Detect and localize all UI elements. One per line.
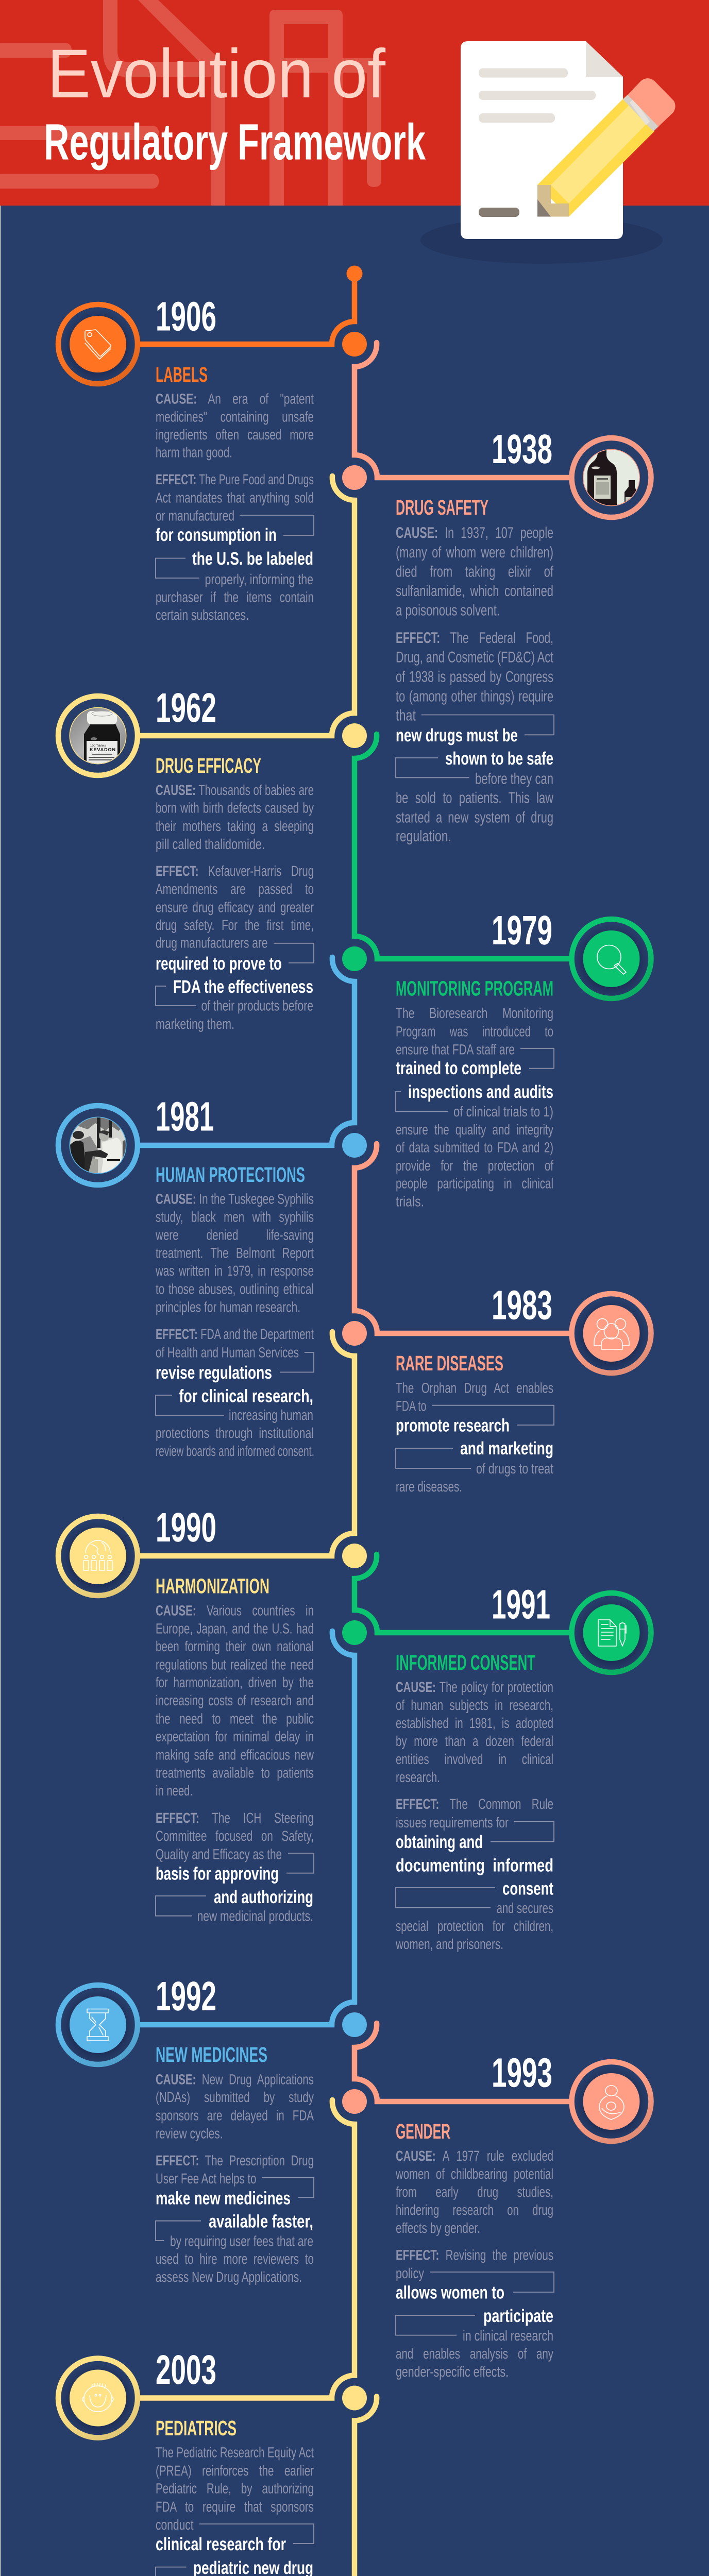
effect text: and secures bbox=[497, 1900, 553, 1916]
cause text: CAUSE: In 1937, 107 people bbox=[396, 524, 553, 541]
effect text: drug safety. For the first time, bbox=[156, 917, 314, 933]
timeline: final yellow segment bbox=[354, 2397, 377, 2576]
highlight callout: allows women to bbox=[396, 2283, 504, 2303]
effect text: drug manufacturers are bbox=[156, 935, 268, 951]
cause text: their mothers taking a sleeping bbox=[156, 818, 314, 834]
heading: NEW MEDICINES bbox=[156, 2043, 267, 2066]
highlight callout: shown to be safe bbox=[445, 749, 553, 769]
body text: FDA to bbox=[396, 1398, 427, 1414]
highlight callout: inspections and audits bbox=[408, 1082, 553, 1102]
effect text: Act mandates that anything sold bbox=[156, 489, 314, 506]
icon: magnifying glass bbox=[572, 919, 651, 998]
panel: 1983 rare diseases bbox=[396, 1282, 651, 1495]
year: 1991 bbox=[492, 1582, 550, 1627]
effect text: EFFECT: The Prescription Drug bbox=[156, 2153, 314, 2168]
effect text: User Fee Act helps to bbox=[156, 2171, 257, 2187]
cause text bbox=[396, 524, 553, 619]
effect text bbox=[396, 2247, 554, 2380]
effect text: used to hire more reviewers to bbox=[156, 2251, 314, 2267]
effect text: or manufactured bbox=[156, 508, 234, 524]
cause text: born with birth defects caused by bbox=[156, 800, 314, 816]
cause text bbox=[396, 1679, 553, 1785]
panel: 1906 labels bbox=[58, 294, 314, 623]
body text: of drugs to treat bbox=[476, 1461, 553, 1477]
body text: The Orphan Drug Act enables bbox=[396, 1380, 553, 1396]
icon: mother and child bbox=[572, 2062, 651, 2141]
timeline: salmon segment to 1983 bbox=[354, 1144, 569, 1333]
effect text: issues requirements for bbox=[396, 1815, 509, 1831]
timeline: green segment to 1991 bbox=[354, 1554, 569, 1633]
effect text: Amendments are passed to bbox=[156, 881, 314, 897]
highlight callout bbox=[156, 1363, 313, 1406]
heading: INFORMED CONSENT bbox=[396, 1651, 535, 1674]
body text: The Bioresearch Monitoring bbox=[396, 1005, 553, 1021]
cause text: CAUSE: A 1977 rule excluded bbox=[396, 2148, 553, 2164]
highlight callout bbox=[396, 1058, 553, 1102]
year: 1906 bbox=[156, 294, 216, 339]
cause text: CAUSE: The policy for protection bbox=[396, 1679, 553, 1695]
highlight callout: and authorizing bbox=[214, 1887, 313, 1907]
timeline: start cap bbox=[346, 266, 363, 281]
cause text: the need to meet the public bbox=[156, 1710, 314, 1727]
photo: Kevadon bottle: 100 Tablets bbox=[90, 744, 106, 748]
effect text: ensure drug efficacy and greater bbox=[156, 900, 314, 915]
body text: Program was introduced to bbox=[396, 1024, 553, 1040]
effect text: purchaser if the items contain bbox=[156, 589, 314, 605]
cause text bbox=[156, 391, 314, 461]
header background document pattern bbox=[0, 0, 381, 206]
panel: 2003 pediatrics bbox=[58, 2347, 314, 2576]
icon: group of people bbox=[572, 1294, 651, 1373]
panel: 1938 drug safety bbox=[396, 426, 651, 845]
year: 1979 bbox=[492, 907, 552, 953]
cause text: entities involved in clinical bbox=[396, 1751, 553, 1767]
panel: 1991 informed consent bbox=[395, 1582, 651, 1952]
body text: trials. bbox=[396, 1193, 424, 1210]
effect text: EFFECT: FDA and the Department bbox=[156, 1326, 314, 1342]
effect text: assess New Drug Applications. bbox=[156, 2269, 302, 2285]
body text: ensure the quality and integrity bbox=[396, 1122, 553, 1138]
icon: document and pen bbox=[572, 1593, 651, 1672]
cause text: a poisonous solvent. bbox=[396, 602, 500, 619]
effect text: in clinical research bbox=[463, 2328, 553, 2344]
cause text: increasing costs of research and bbox=[156, 1692, 314, 1708]
heading: PEDIATRICS bbox=[156, 2416, 237, 2440]
panel: 1981 human protections bbox=[58, 1094, 314, 1459]
body text bbox=[396, 1380, 554, 1495]
cause text: research. bbox=[396, 1769, 440, 1785]
cause text: regulations but realized the need bbox=[156, 1657, 314, 1673]
cause text bbox=[155, 1191, 314, 1315]
cause text: Europe, Japan, and the U.S. had bbox=[156, 1621, 314, 1636]
highlight callout: participate bbox=[483, 2306, 553, 2326]
effect text: EFFECT: Revising the previous bbox=[396, 2247, 553, 2263]
cause text bbox=[156, 782, 314, 852]
cause text: treatment. The Belmont Report bbox=[156, 1245, 314, 1261]
effect text: that bbox=[396, 707, 416, 724]
title bbox=[44, 36, 426, 170]
highlight callout: consent bbox=[502, 1879, 553, 1899]
effect text: special protection for children, bbox=[396, 1918, 553, 1934]
heading: MONITORING PROGRAM bbox=[396, 977, 553, 1001]
highlight callout: make new medicines bbox=[156, 2189, 291, 2209]
effect text: increasing human bbox=[229, 1407, 313, 1423]
cause text: effects by gender. bbox=[396, 2220, 480, 2236]
cause text: established in 1981, is adopted bbox=[396, 1715, 553, 1731]
effect text: new medicinal products. bbox=[197, 1908, 313, 1924]
header band bbox=[0, 0, 709, 206]
cause text: harm than good. bbox=[156, 444, 232, 461]
highlight callout bbox=[396, 1832, 553, 1899]
cause text: expectation for minimal delay in bbox=[156, 1728, 314, 1744]
cause text: principles for human research. bbox=[156, 1299, 300, 1315]
panel: 1962 drug efficacy bbox=[58, 685, 314, 1032]
cause text: CAUSE: Various countries in bbox=[156, 1603, 314, 1619]
timeline: salmon segment to 1938 bbox=[354, 343, 569, 478]
highlight callout: for clinical research, bbox=[179, 1386, 313, 1406]
effect text: Drug, and Cosmetic (FD&C) Act bbox=[396, 649, 553, 666]
effect text: Committee focused on Safety, bbox=[156, 1828, 314, 1844]
heading: HARMONIZATION bbox=[156, 1574, 269, 1598]
effect text: regulation. bbox=[396, 828, 451, 845]
body text: FDA to require that sponsors bbox=[156, 2499, 314, 2515]
effect text: gender-specific effects. bbox=[396, 2364, 509, 2380]
cause text bbox=[395, 2148, 553, 2236]
cause text: ingredients often caused more bbox=[156, 427, 314, 443]
cause text: died from taking elixir of bbox=[396, 564, 553, 580]
effect text bbox=[396, 630, 554, 845]
body text: Pediatric Rule, by authorizing bbox=[156, 2481, 314, 2497]
body text: conduct bbox=[156, 2517, 194, 2533]
effect text: EFFECT: The Pure Food and Drugs bbox=[156, 471, 314, 487]
title: Evolution of bbox=[47, 36, 386, 112]
cause text: sulfanilamide, which contained bbox=[396, 583, 553, 600]
cause text: CAUSE: An era of "patent bbox=[156, 391, 314, 407]
body text: (PREA) reinforces the earlier bbox=[156, 2463, 314, 2479]
heading: LABELS bbox=[156, 363, 208, 386]
effect text: be sold to patients. This law bbox=[396, 789, 553, 807]
effect text: before they can bbox=[475, 770, 553, 787]
timeline: yellow segment to 1990 bbox=[140, 1332, 354, 1556]
timeline dots bbox=[342, 332, 367, 2410]
effect text: policy bbox=[396, 2265, 424, 2281]
effect text: certain substances. bbox=[156, 607, 249, 623]
effect text: and enables analysis of any bbox=[396, 2346, 553, 2362]
effect text: of 1938 is passed by Congress bbox=[396, 669, 553, 686]
cause text: was written in 1979, in response bbox=[155, 1263, 314, 1279]
cause text: sponsors are delayed in FDA bbox=[156, 2108, 314, 2124]
highlight callout bbox=[396, 2283, 553, 2326]
heading: DRUG SAFETY bbox=[396, 496, 488, 519]
icon: hourglass bbox=[58, 1985, 138, 2064]
body text: ensure that FDA staff are bbox=[396, 1041, 515, 1057]
cause text bbox=[156, 1603, 314, 1799]
timeline: blue segment to 1992 bbox=[140, 1631, 354, 2025]
body text: provide for the protection of bbox=[396, 1158, 553, 1174]
highlight callout bbox=[396, 1416, 553, 1459]
heading: DRUG EFFICACY bbox=[156, 754, 261, 777]
effect text bbox=[395, 1796, 554, 1952]
cause text: by more than a dozen federal bbox=[396, 1733, 553, 1749]
panel: 1993 gender bbox=[395, 2049, 651, 2380]
cause text: CAUSE: New Drug Applications bbox=[156, 2071, 314, 2088]
panel: 1990 harmonization bbox=[58, 1504, 314, 1924]
body text: of data submitted to FDA and 2) bbox=[396, 1140, 553, 1156]
highlight callout bbox=[396, 725, 553, 769]
heading: HUMAN PROTECTIONS bbox=[156, 1163, 305, 1187]
body text: The Pediatric Research Equity Act bbox=[156, 2445, 314, 2461]
cause text: pill called thalidomide. bbox=[156, 836, 265, 852]
highlight callout: and marketing bbox=[460, 1438, 553, 1459]
highlight callout bbox=[156, 525, 313, 569]
cause text: were denied life-saving bbox=[155, 1227, 314, 1243]
highlight callout: for consumption in bbox=[156, 525, 277, 545]
year: 1981 bbox=[156, 1094, 214, 1140]
effect text bbox=[156, 863, 314, 1032]
cause text: in need. bbox=[156, 1783, 193, 1799]
effect text: women, and prisoners. bbox=[395, 1936, 503, 1952]
highlight callout bbox=[156, 2534, 313, 2576]
year: 1992 bbox=[156, 1973, 216, 2019]
cause text: for harmonization, driven by the bbox=[156, 1674, 314, 1690]
highlight callout bbox=[156, 2189, 313, 2232]
highlight callout: revise regulations bbox=[156, 1363, 272, 1383]
cause text: review cycles. bbox=[156, 2125, 223, 2141]
effect text: review boards and informed consent. bbox=[156, 1443, 314, 1459]
highlight callout: promote research bbox=[396, 1416, 510, 1436]
highlight callout: available faster, bbox=[209, 2212, 313, 2232]
effect text: EFFECT: The Federal Food, bbox=[396, 630, 553, 647]
cause text: study, black men with syphilis bbox=[156, 1209, 314, 1225]
highlight callout: the U.S. be labeled bbox=[192, 549, 313, 569]
year: 1990 bbox=[156, 1504, 216, 1550]
cause text: of human subjects in research, bbox=[396, 1697, 553, 1713]
photo: Kevadon bottle: KEVADON bbox=[90, 747, 115, 752]
timeline: yellow segment to 2003 bbox=[140, 2100, 354, 2398]
cause text bbox=[156, 2071, 314, 2141]
body text: rare diseases. bbox=[396, 1479, 462, 1495]
effect text bbox=[156, 1810, 314, 1924]
highlight callout: new drugs must be bbox=[396, 725, 518, 745]
cause text: women of childbearing potential bbox=[395, 2166, 553, 2182]
cause text: been forming their own national bbox=[156, 1638, 314, 1654]
cause text: hindering research on drug bbox=[396, 2202, 553, 2218]
year: 2003 bbox=[156, 2347, 216, 2393]
cause text: medicines" containing unsafe bbox=[156, 409, 314, 425]
highlight callout: basis for approving bbox=[156, 1864, 279, 1884]
title: Regulatory Framework bbox=[44, 113, 426, 170]
cause text: to those abuses, outlining ethical bbox=[156, 1281, 314, 1297]
illustration: document and pencil bbox=[420, 41, 676, 264]
effect text: marketing them. bbox=[156, 1016, 234, 1032]
cause text: treatments available to patients bbox=[156, 1765, 314, 1781]
body text: of clinical trials to 1) bbox=[453, 1104, 553, 1120]
year: 1993 bbox=[492, 2049, 552, 2095]
photo: Kevadon bottle bbox=[58, 696, 138, 775]
icon: globe with people bbox=[58, 1516, 138, 1596]
effect text: EFFECT: The ICH Steering bbox=[156, 1810, 314, 1826]
icon: price tags bbox=[58, 304, 138, 384]
effect text: properly, informing the bbox=[205, 571, 313, 587]
photo: researcher with patient bbox=[58, 1106, 138, 1185]
cause text: CAUSE: In the Tuskegee Syphilis bbox=[156, 1191, 314, 1207]
highlight callout: obtaining and bbox=[396, 1832, 483, 1852]
photo: elixir bottles bbox=[572, 438, 651, 517]
cause text: making safe and efficacious new bbox=[156, 1747, 314, 1763]
effect text bbox=[156, 471, 314, 623]
cause text: (NDAs) submitted by study bbox=[156, 2089, 314, 2105]
timeline: blue segment to 1981 bbox=[140, 957, 354, 1145]
body text bbox=[156, 2445, 314, 2576]
effect text: Quality and Efficacy as the bbox=[156, 1846, 282, 1862]
effect text: protections through institutional bbox=[156, 1425, 314, 1441]
year: 1938 bbox=[492, 426, 552, 472]
panel: 1992 new medicines bbox=[58, 1973, 314, 2285]
cause text: from early drug studies, bbox=[396, 2184, 553, 2200]
timeline: salmon segment to 1993 bbox=[354, 2023, 569, 2102]
effect text: to (among other things) require bbox=[396, 688, 553, 705]
effect text: started a new system of drug bbox=[396, 809, 553, 826]
effect text bbox=[156, 1326, 314, 1459]
highlight callout: documenting informed bbox=[396, 1856, 553, 1876]
timeline: orange segment to 1906 bbox=[140, 274, 354, 344]
highlight callout bbox=[156, 1864, 313, 1907]
body text bbox=[396, 1005, 554, 1210]
highlight callout: clinical research for bbox=[156, 2534, 286, 2554]
heading: GENDER bbox=[396, 2120, 450, 2143]
highlight callout bbox=[156, 954, 313, 997]
effect text: of Health and Human Services bbox=[156, 1344, 299, 1360]
heading: RARE DISEASES bbox=[396, 1351, 503, 1375]
effect text: of their products before bbox=[201, 998, 313, 1014]
highlight callout: FDA the effectiveness bbox=[173, 977, 313, 997]
highlight callout: required to prove to bbox=[156, 954, 282, 974]
highlight callout: trained to complete bbox=[396, 1058, 521, 1078]
body text: people participating in clinical bbox=[396, 1176, 553, 1192]
timeline: yellow segment to 1962 bbox=[140, 476, 354, 736]
panel: 1979 monitoring program bbox=[396, 907, 651, 1210]
timeline: green segment to 1979 bbox=[354, 734, 569, 959]
cause text: CAUSE: Thousands of babies are bbox=[156, 782, 314, 798]
year: 1983 bbox=[492, 1282, 552, 1328]
effect text: EFFECT: The Common Rule bbox=[396, 1796, 553, 1812]
year: 1962 bbox=[156, 685, 216, 731]
icon: baby face bbox=[58, 2359, 138, 2438]
cause text: (many of whom were children) bbox=[396, 544, 553, 561]
effect text bbox=[156, 2153, 314, 2285]
effect text: EFFECT: Kefauver-Harris Drug bbox=[156, 863, 314, 879]
effect text: by requiring user fees that are bbox=[170, 2233, 313, 2249]
